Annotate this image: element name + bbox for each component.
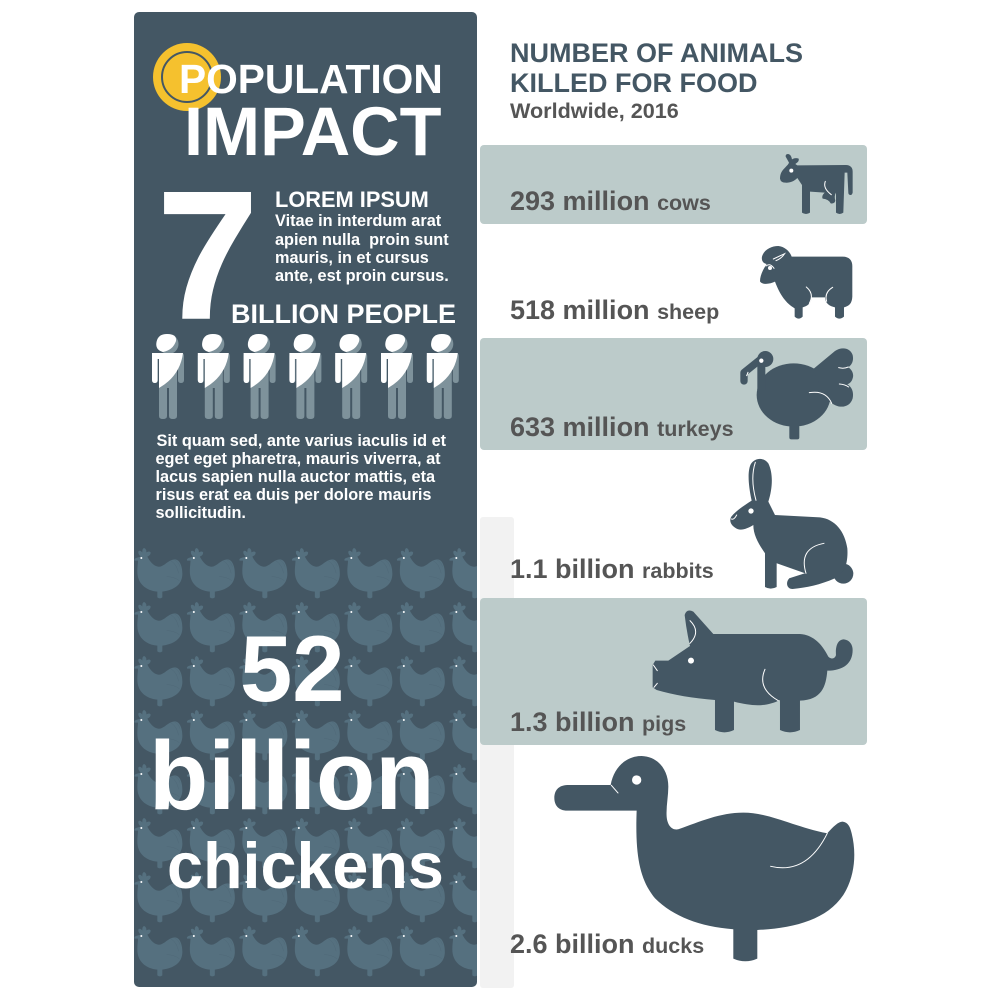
label: rabbits: 1.1 billion rabbits — [510, 554, 714, 584]
big number 7: 7 — [157, 153, 258, 357]
text block: sit quam: Sit quam sed, ante varius iaculis id et — [156, 432, 447, 450]
icon: rabbit — [730, 459, 853, 589]
text block: lorem ipsum — [275, 187, 449, 285]
big stat: 52 billion chickens: chickens — [167, 829, 444, 902]
panel: turkeys — [480, 338, 867, 450]
label: turkeys: 633 million turkeys — [510, 412, 734, 442]
heading: number of animals killed: Worldwide, 2016 — [510, 98, 679, 123]
background column behind animals — [480, 517, 514, 988]
row: sheep — [510, 246, 852, 325]
label: cows: 293 million cows — [510, 186, 711, 216]
heading: population impact: POPULATION — [179, 56, 443, 102]
panel: population impact — [134, 12, 497, 987]
heading: population impact: IMPACT — [184, 93, 442, 170]
chicken pattern — [134, 548, 497, 976]
icon: turkey — [744, 348, 853, 439]
icon: yellow target circle — [153, 43, 221, 111]
big stat: 52 billion chickens: 52 — [240, 616, 345, 721]
text block: sit quam: eget eget pharetra, mauris viverra, at — [156, 450, 441, 468]
heading: number of animals killed: NUMBER OF ANIMALS — [510, 38, 803, 68]
heading: population impact — [179, 56, 443, 170]
row: ducks — [510, 756, 854, 961]
icon: pig — [653, 611, 853, 732]
big stat: 52 billion chickens — [149, 616, 444, 902]
text block: sit quam: risus erat ea duis per dolore mauris — [156, 486, 431, 504]
text block: lorem ipsum: ante, est proin cursus. — [275, 267, 449, 285]
icon: sheep — [760, 246, 852, 319]
panel: cows — [480, 145, 867, 224]
heading: billion people: BILLION PEOPLE — [231, 299, 456, 329]
text block: sit quam — [156, 432, 447, 522]
text block: sit quam: lacus sapien nulla auctor mattis, eta — [156, 468, 436, 486]
heading: number of animals killed — [510, 38, 803, 123]
icon: cow — [780, 154, 853, 214]
text block: lorem ipsum: Vitae in interdum arat — [275, 212, 442, 230]
icon: duck — [554, 756, 854, 961]
big stat: 52 billion chickens: billion — [149, 721, 435, 830]
text block: sit quam: sollicitudin. — [156, 504, 246, 522]
label: sheep: 518 million sheep — [510, 295, 719, 325]
heading: number of animals killed: KILLED FOR FOOD — [510, 68, 757, 98]
icon row: seven people — [152, 334, 459, 419]
text block: lorem ipsum: apien nulla proin sunt — [275, 231, 449, 249]
panel: pigs — [480, 598, 867, 745]
label: pigs: 1.3 billion pigs — [510, 707, 686, 737]
text block: lorem ipsum: LOREM IPSUM — [275, 187, 429, 212]
label: ducks: 2.6 billion ducks — [510, 929, 704, 959]
row: rabbits — [510, 459, 853, 589]
text block: lorem ipsum: mauris, in et cursus — [275, 249, 429, 267]
